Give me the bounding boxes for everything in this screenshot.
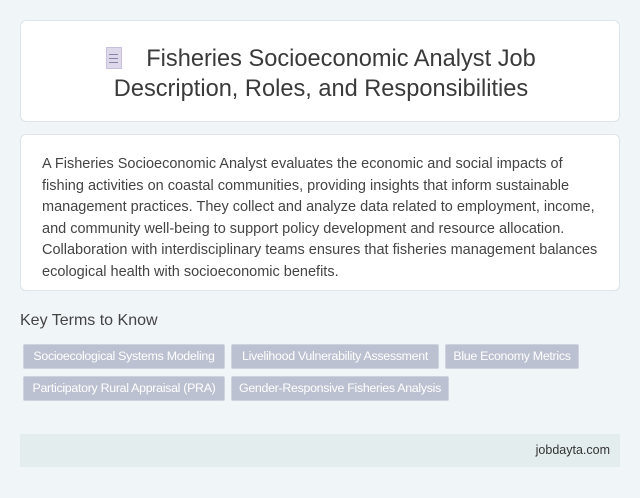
description text: [42, 156, 597, 280]
title: Description, Roles, and Responsibilities: [114, 76, 528, 102]
key terms heading: Key Terms to Know: [20, 312, 158, 329]
footer: [20, 434, 620, 467]
description text: ecological health with socioeconomic benefits.: [42, 264, 339, 280]
tag 1: [23, 344, 225, 369]
tag 5: Gender-Responsive Fisheries Analysis: [239, 381, 441, 395]
tag 5: [231, 376, 449, 401]
icon: document: [106, 47, 122, 69]
tag 4: [23, 376, 225, 401]
description card: [20, 134, 620, 291]
tag 4: Participatory Rural Appraisal (PRA): [32, 381, 216, 395]
tag 2: [231, 344, 439, 369]
description text: Collaboration with interdisciplinary teams ensures that fisheries management balances: [42, 242, 597, 258]
description text: management practices. They collect and analyze data related to employment, income,: [42, 199, 595, 215]
tag 3: Blue Economy Metrics: [453, 349, 571, 363]
title: [106, 46, 536, 102]
description text: fishing activities on coastal communities, providing insights that inform sustainable: [42, 178, 569, 194]
footer site name: jobdayta.com: [536, 443, 610, 457]
description text: and community well-being to support policy development and resource allocation.: [42, 221, 564, 237]
tag 3: [445, 344, 579, 369]
tag 1: Socioecological Systems Modeling: [33, 349, 215, 363]
title: Fisheries Socioeconomic Analyst Job: [146, 46, 536, 72]
tag 2: Livelihood Vulnerability Assessment: [242, 349, 428, 363]
header card: [20, 20, 620, 122]
description text: A Fisheries Socioeconomic Analyst evaluates the economic and social impacts of: [42, 156, 563, 172]
